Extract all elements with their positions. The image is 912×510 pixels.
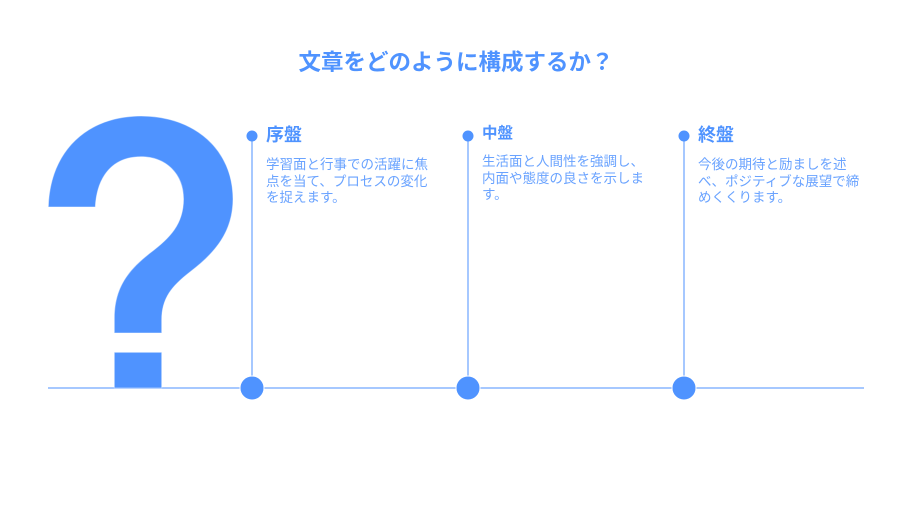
text: middle: 内面や態度の良さを示しま	[482, 170, 644, 186]
text: middle	[482, 154, 644, 202]
heading: opening: 序盤	[266, 125, 302, 145]
marker: closing	[672, 130, 696, 400]
text: middle: 生活面と人間性を強調し、	[482, 154, 644, 169]
text: opening: 点を当て、プロセスの変化	[266, 174, 427, 188]
text: opening: 学習面と行事での活躍に焦	[266, 157, 428, 172]
text: closing: 今後の期待と励ましを述	[698, 157, 846, 172]
marker: middle	[456, 130, 480, 400]
text: middle: す。	[482, 187, 508, 202]
text: opening: を捉えます。	[266, 190, 346, 205]
text: closing	[698, 157, 859, 205]
heading: middle: 中盤	[482, 125, 513, 142]
heading: closing: 終盤	[698, 125, 734, 145]
title: 文章をどのように構成するか？	[298, 50, 614, 75]
marker: opening	[240, 130, 264, 400]
text: closing: べ、ポジティブな展望で締	[698, 174, 859, 188]
text: closing: めくくります。	[698, 190, 791, 205]
icon: large question mark	[48, 116, 233, 388]
baseline	[48, 387, 864, 389]
text: opening	[266, 157, 428, 205]
